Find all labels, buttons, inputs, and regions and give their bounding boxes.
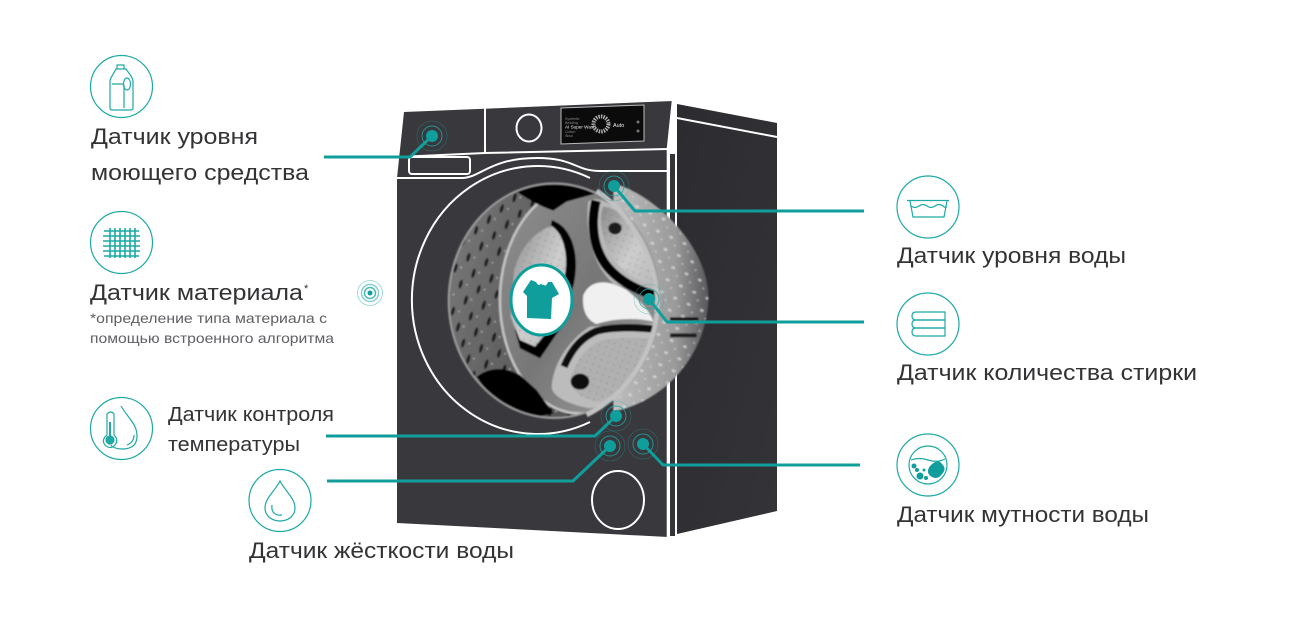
text: detergent label bbox=[91, 124, 310, 185]
text: laundry amount label: Датчик количества стирки bbox=[897, 360, 1197, 385]
text: material footnote: помощью встроенного алгоритма bbox=[90, 330, 334, 346]
panel: water level sensor bbox=[897, 176, 1126, 268]
washing machine bbox=[397, 101, 777, 537]
black shadows bbox=[517, 183, 597, 211]
text: detergent label: моющего средства bbox=[91, 160, 310, 185]
icon: thermometer and drop bbox=[90, 398, 152, 460]
text: detergent label: Датчик уровня bbox=[91, 124, 258, 149]
text: temperature label: Датчик контроля bbox=[168, 404, 334, 426]
drum inner wall bbox=[448, 183, 660, 419]
drum bbox=[448, 183, 708, 419]
panel: material sensor bbox=[90, 212, 334, 346]
line: laundry amount bbox=[649, 299, 864, 322]
line: detergent level bbox=[324, 136, 432, 157]
sensor: hardness bbox=[595, 431, 625, 461]
icon: folded laundry stack bbox=[897, 293, 959, 355]
display: Auto bbox=[613, 123, 624, 129]
fabric badge bbox=[511, 265, 572, 335]
panel: water turbidity sensor bbox=[897, 434, 1149, 527]
display: AI Super Wash bbox=[565, 124, 596, 130]
text: temperature label: температуры bbox=[168, 434, 300, 456]
upper-left pocket bbox=[515, 220, 576, 358]
panel: detergent level sensor bbox=[90, 56, 310, 185]
text: hardness label: Датчик жёсткости воды bbox=[249, 538, 514, 563]
panel: temperature sensor bbox=[90, 398, 334, 460]
sensor: water level bbox=[599, 171, 629, 201]
icon: fabric weave bbox=[90, 212, 152, 274]
machine side panel bbox=[670, 104, 777, 536]
icon: water drop bbox=[249, 470, 311, 532]
sensor lines bbox=[324, 136, 864, 481]
display: Cotton bbox=[565, 130, 575, 134]
text: material footnote bbox=[90, 310, 334, 346]
drum rim bbox=[449, 183, 659, 418]
icon: detergent bottle bbox=[90, 56, 152, 118]
text: material footnote: *определение типа материала с bbox=[90, 310, 327, 326]
line: water hardness bbox=[327, 446, 610, 481]
display: Bedding bbox=[565, 121, 578, 125]
hub bbox=[583, 282, 653, 324]
drum barrel bbox=[613, 183, 708, 412]
upper-right pocket bbox=[586, 198, 654, 292]
sensor: turbidity bbox=[628, 429, 658, 459]
line: water turbidity bbox=[643, 444, 860, 465]
sensor points bbox=[358, 121, 664, 461]
icon: turbid water bbox=[897, 434, 959, 496]
display: Synthetic bbox=[565, 117, 580, 121]
text: material label: * bbox=[304, 283, 309, 295]
icon: basin with water bbox=[897, 176, 959, 238]
display bbox=[561, 105, 644, 144]
text: material label: Датчик материала bbox=[90, 280, 304, 305]
machine front panel bbox=[397, 101, 676, 537]
display: Wool bbox=[565, 134, 573, 138]
sensor: detergent bbox=[417, 121, 447, 151]
icon: t-shirt bbox=[523, 280, 559, 319]
line: water level bbox=[614, 186, 864, 211]
sensor: material bbox=[358, 280, 382, 306]
text: turbidity label: Датчик мутности воды bbox=[897, 502, 1149, 527]
sensor: temperature bbox=[601, 401, 631, 431]
text: temperature label bbox=[168, 404, 334, 456]
control knob bbox=[516, 114, 542, 142]
sensor: laundry amount bbox=[634, 284, 664, 314]
panel: laundry amount sensor bbox=[897, 293, 1197, 385]
bottom pocket bbox=[552, 323, 660, 408]
drum back plate bbox=[477, 183, 663, 418]
text: water level label: Датчик уровня воды bbox=[897, 243, 1126, 268]
line: temperature bbox=[326, 416, 616, 436]
panel: water hardness sensor bbox=[249, 470, 514, 563]
